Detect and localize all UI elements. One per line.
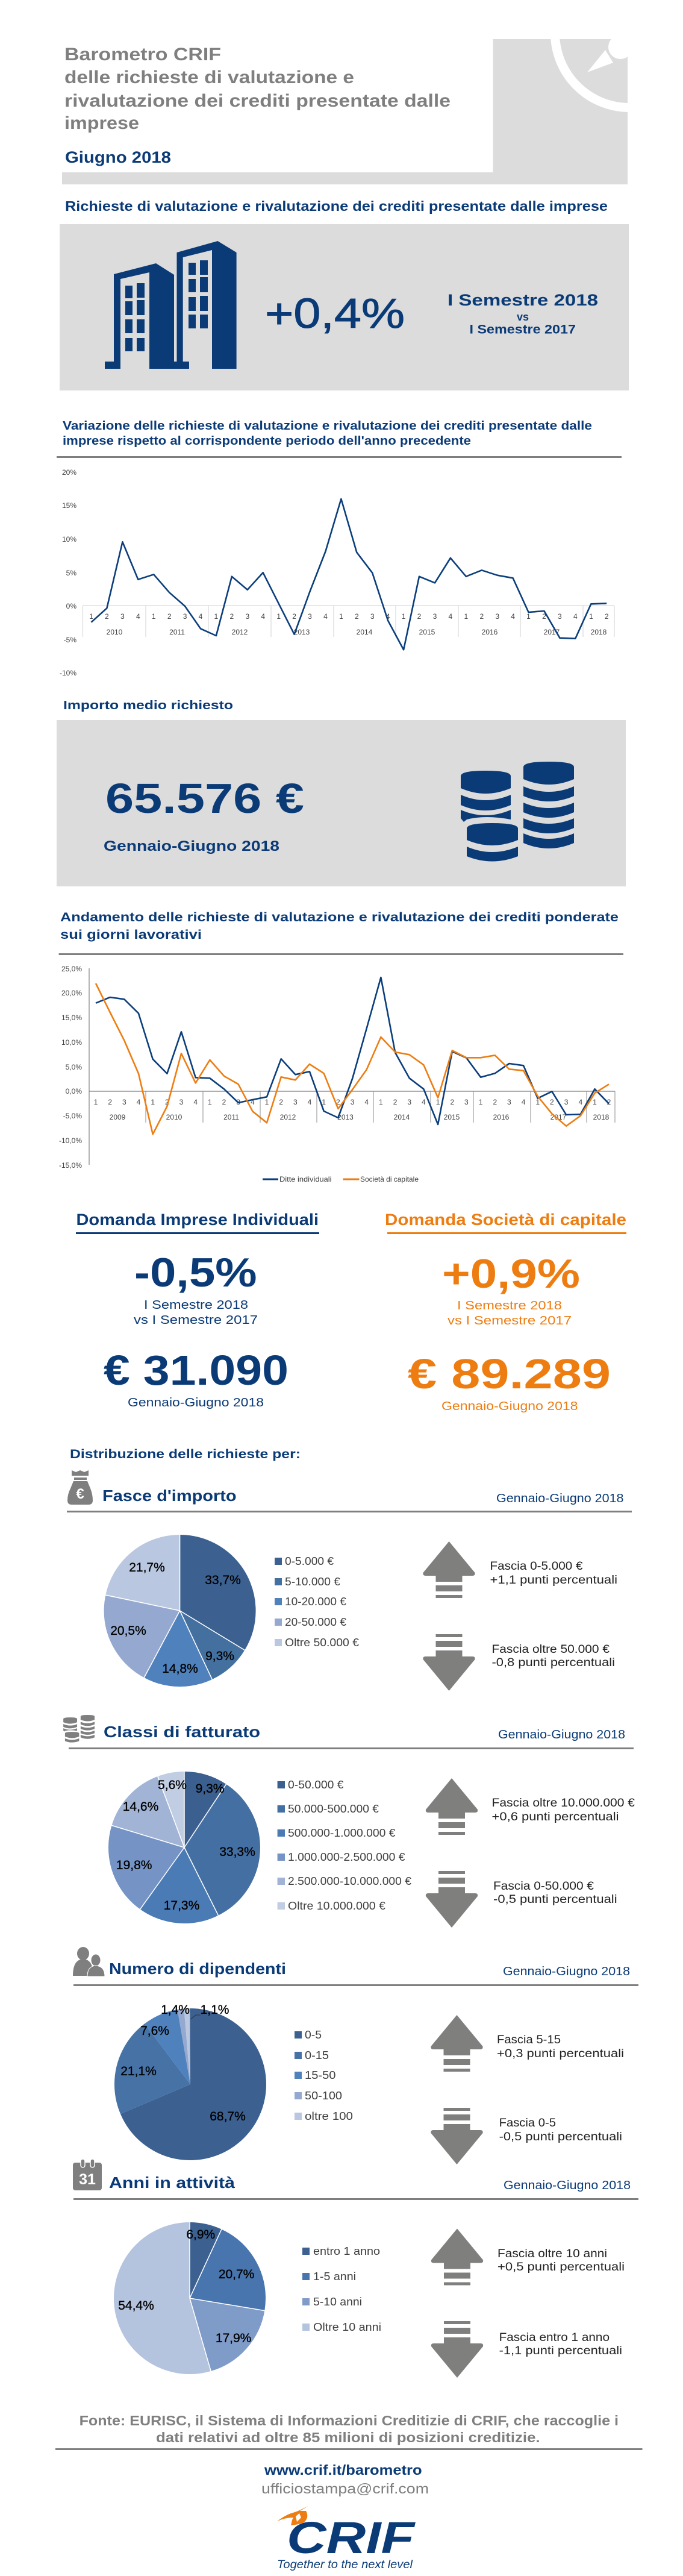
arrow down text: -0,5 punti percentuali (493, 1893, 617, 1906)
quarter labels: 4 (511, 612, 515, 621)
arrow up text (490, 1560, 617, 1587)
pie value labels: 54,4% (118, 2299, 154, 2313)
heading (60, 910, 619, 942)
year labels (107, 628, 607, 636)
pie value labels: 9,3% (196, 1782, 224, 1796)
pie value labels (116, 1778, 255, 1913)
legend: 15-50 (305, 2069, 336, 2081)
quarter labels: 4 (573, 612, 578, 621)
header white inset (62, 39, 493, 172)
year labels: 2015 (444, 1113, 460, 1121)
pie value labels: 33,7% (205, 1573, 241, 1587)
quarter labels: 1 (464, 612, 468, 621)
icon: money bag (67, 1470, 93, 1505)
y axis labels: 10,0% (61, 1038, 82, 1047)
pie value labels: 68,7% (210, 2110, 246, 2123)
section heading: Fasce d'importo (102, 1487, 237, 1505)
arrow down text: -1,1 punti percentuali (499, 2345, 622, 2357)
pie value labels (120, 2003, 246, 2123)
pie value labels: 20,7% (219, 2267, 254, 2281)
arrow down text: -0,8 punti percentuali (491, 1656, 615, 1669)
pie value labels: 21,7% (129, 1561, 165, 1575)
quarter labels: 2 (105, 612, 109, 621)
column: domanda imprese individuali (76, 1211, 319, 1409)
quarter labels: 1 (322, 1098, 326, 1106)
heading: distribuzione: Distribuzione delle richieste per: (70, 1447, 301, 1461)
quarter labels: 4 (193, 1098, 198, 1106)
arrow up text: Fascia oltre 10.000.000 € (491, 1797, 635, 1810)
quarter labels: 1 (535, 1098, 540, 1106)
year labels: 2009 (110, 1113, 126, 1121)
title (64, 45, 451, 133)
pie value labels: 21,1% (120, 2064, 157, 2078)
pie value labels (110, 1561, 241, 1676)
quarter labels: 1 (208, 1098, 212, 1106)
period: vs I Semestre 2017 (448, 1314, 572, 1327)
legend: 50.000-500.000 € (288, 1803, 379, 1815)
y axis labels: -15,0% (59, 1161, 82, 1170)
quarter labels: 2 (230, 612, 234, 621)
year labels: 2014 (357, 628, 373, 636)
panel background (60, 224, 629, 390)
y axis labels: -10% (60, 669, 76, 677)
legend (263, 1175, 419, 1183)
section heading: Numero di dipendenti (109, 1960, 286, 1978)
percentage: -0,5% (134, 1250, 257, 1296)
line series (92, 499, 607, 650)
legend: Società di capitale (360, 1175, 419, 1183)
year labels: 2013 (294, 628, 310, 636)
quarter labels: 2 (393, 1098, 398, 1106)
source note: dati relativi ad oltre 85 milioni di posizioni creditizie. (156, 2430, 540, 2445)
quarter labels: 1 (151, 1098, 155, 1106)
period: Gennaio-Giugno 2018 (498, 1728, 625, 1741)
y axis labels: 10% (62, 535, 76, 544)
period: Gennaio-Giugno 2018 (504, 2179, 631, 2192)
period comparison: I Semestre 2017 (470, 323, 576, 336)
panel: average amount (57, 720, 626, 886)
legend (295, 2029, 353, 2122)
legend: 1-5 anni (313, 2270, 356, 2283)
period comparison (448, 291, 598, 336)
quarter labels: 3 (122, 1098, 126, 1106)
arrow up (423, 1541, 475, 1598)
legend: Ditte individuali (279, 1175, 331, 1183)
icon: gauge dial (550, 39, 628, 112)
y axis labels: 25,0% (61, 965, 82, 973)
arrow up text: Fascia 0-5.000 € (490, 1560, 583, 1573)
year labels: 2011 (223, 1113, 239, 1121)
y axis labels (59, 965, 82, 1170)
section: weighted trend line chart (59, 910, 623, 1183)
arrow up text: +0,6 punti percentuali (491, 1811, 619, 1823)
panel background (57, 720, 626, 886)
y axis labels (60, 468, 76, 677)
leader line (191, 2015, 201, 2019)
icon: people (73, 1947, 105, 1976)
arrow down text (493, 1880, 617, 1906)
pie value labels: 19,8% (116, 1858, 152, 1872)
section: variation line chart (57, 419, 622, 677)
quarter labels: 4 (136, 612, 140, 621)
column heading: Domanda Società di capitale (385, 1211, 626, 1229)
arrow down text (499, 2331, 622, 2357)
quarter labels: 1 (94, 1098, 98, 1106)
quarter labels: 3 (564, 1098, 569, 1106)
legend: Oltre 50.000 € (285, 1637, 359, 1649)
section: anni in attivita (73, 2159, 638, 2378)
arrow down text: Fascia oltre 50.000 € (491, 1643, 610, 1656)
quarter labels: 3 (407, 1098, 411, 1106)
year labels: 2015 (419, 628, 435, 636)
y axis labels: 5% (66, 569, 76, 577)
arrow down text (499, 2117, 622, 2143)
quarter labels: 4 (137, 1098, 141, 1106)
legend: 0-5.000 € (285, 1555, 334, 1567)
pie chart (152, 2046, 228, 2122)
pie value labels: 9,3% (205, 1649, 234, 1663)
period (448, 1299, 572, 1327)
heading (63, 419, 592, 448)
series: societa di capitale (96, 983, 609, 1134)
y axis labels: 0,0% (66, 1087, 82, 1095)
quarter labels: 2 (336, 1098, 340, 1106)
quarter labels: 3 (183, 612, 187, 621)
logo swoosh (277, 2506, 308, 2525)
arrow up text: Fascia oltre 10 anni (497, 2248, 607, 2260)
quarter labels: 2 (165, 1098, 169, 1106)
legend: 0-50.000 € (288, 1779, 343, 1791)
column heading: Domanda Imprese Individuali (76, 1211, 319, 1229)
amount period: Gennaio-Giugno 2018 (128, 1396, 264, 1409)
quarter labels: 2 (605, 612, 609, 621)
section: numero di dipendenti (73, 1947, 638, 2164)
section: classi di fatturato (63, 1715, 635, 1928)
period: I Semestre 2018 (144, 1299, 248, 1312)
year labels: 2011 (169, 628, 185, 636)
period: vs I Semestre 2017 (134, 1314, 258, 1327)
year labels: 2016 (493, 1113, 510, 1121)
quarter labels: 4 (251, 1098, 255, 1106)
quarter labels: 1 (214, 612, 219, 621)
legend: 1.000.000-2.500.000 € (288, 1851, 405, 1863)
legend (275, 1555, 359, 1649)
quarter labels: 2 (417, 612, 422, 621)
value: 65.576 € (105, 775, 304, 822)
y axis labels: 20,0% (61, 989, 82, 997)
quarter labels: 1 (479, 1098, 483, 1106)
heading: imprese rispetto al corrispondente periodo dell'anno precedente (63, 434, 471, 448)
heading: richieste: Richieste di valutazione e rivalutazione dei crediti presentate dalle imprese (65, 198, 608, 214)
heading: importo medio: Importo medio richiesto (63, 699, 233, 712)
y axis labels: 15,0% (61, 1014, 82, 1022)
pie chart (111, 1772, 226, 1916)
title: delle richieste di valutazione e (64, 67, 354, 87)
arrow down (431, 2108, 483, 2164)
quarter labels: 4 (578, 1098, 582, 1106)
heading: Variazione delle richieste di valutazione e rivalutazione dei crediti presentate dalle (63, 419, 592, 433)
quarter labels: 2 (607, 1098, 611, 1106)
arrow down text (491, 1643, 615, 1669)
legend: Oltre 10.000.000 € (288, 1900, 385, 1912)
quarter labels: 3 (464, 1098, 469, 1106)
pie value labels: 14,6% (123, 1800, 158, 1814)
legend: 10-20.000 € (285, 1596, 346, 1608)
quarter labels: 1 (276, 612, 281, 621)
pie value labels: 33,3% (219, 1845, 255, 1859)
pie value labels: 17,9% (216, 2331, 251, 2345)
quarter labels: 4 (522, 1098, 526, 1106)
period: I Semestre 2018 (457, 1299, 562, 1312)
year labels: 2012 (280, 1113, 296, 1121)
quarter labels: 2 (167, 612, 172, 621)
icon: calendar: 31 (79, 2171, 96, 2188)
quarter labels: 4 (261, 612, 265, 621)
year labels: 2018 (593, 1113, 610, 1121)
period comparison: vs (517, 311, 529, 323)
quarter labels: 1 (265, 1098, 269, 1106)
quarter labels: 3 (245, 612, 249, 621)
y axis labels: 5,0% (66, 1063, 82, 1071)
logo word: CRIF (287, 2513, 416, 2563)
legend (278, 1779, 411, 1912)
pie value labels: 6,9% (186, 2228, 215, 2242)
legend (302, 2245, 381, 2333)
logo tagline: Together to the next level (277, 2559, 413, 2571)
percentage: +0,9% (442, 1251, 580, 1297)
year labels: 2010 (166, 1113, 182, 1121)
heading: sui giorni lavorativi (60, 928, 202, 942)
panel: variation kpi (60, 224, 629, 390)
year labels: 2013 (337, 1113, 354, 1121)
arrow up text: Fascia 5-15 (497, 2034, 561, 2046)
quarter labels: 3 (370, 612, 375, 621)
icon: calendar (73, 2159, 102, 2190)
quarter labels: 2 (292, 612, 296, 621)
section heading: Classi di fatturato (104, 1723, 260, 1741)
arrow down text: Fascia 0-50.000 € (493, 1880, 594, 1893)
quarter labels: 3 (558, 612, 562, 621)
amount: € 31.090 (104, 1347, 288, 1394)
legend: 5-10 anni (313, 2296, 362, 2308)
arrow up (426, 1778, 478, 1835)
logo: CRIF (277, 2506, 416, 2571)
quarter labels: 3 (236, 1098, 240, 1106)
quarter labels: 3 (179, 1098, 184, 1106)
quarter labels: 4 (449, 612, 453, 621)
value: +0,4% (265, 290, 405, 337)
quarter labels: 2 (355, 612, 359, 621)
year labels: 2012 (232, 628, 248, 636)
pie value labels: 7,6% (140, 2024, 169, 2038)
source note (80, 2413, 619, 2445)
quarter labels: 1 (379, 1098, 383, 1106)
title: Barometro CRIF (64, 45, 221, 64)
quarter labels: 2 (542, 612, 546, 621)
header panel (62, 39, 628, 184)
year labels (110, 1113, 610, 1121)
quarter labels: 3 (293, 1098, 298, 1106)
quarter labels: 4 (323, 612, 328, 621)
year labels: 2017 (550, 1113, 567, 1121)
icon: money bag: € (76, 1486, 84, 1502)
arrow up (431, 2228, 483, 2285)
quarter labels: 2 (493, 1098, 497, 1106)
legend: 0-15 (305, 2049, 329, 2061)
arrow up text: +0,5 punti percentuali (497, 2261, 625, 2274)
arrow down (431, 2321, 483, 2378)
period comparison: I Semestre 2018 (448, 291, 598, 309)
arrow down text: Fascia 0-5 (499, 2117, 556, 2129)
arrow down (423, 1634, 475, 1691)
quarter labels: 3 (433, 612, 437, 621)
quarter labels: 2 (479, 612, 484, 621)
section heading: Anni in attività (109, 2173, 235, 2192)
arrow up text (497, 2248, 625, 2274)
legend: 0-5 (305, 2029, 322, 2041)
pie chart (152, 2222, 264, 2371)
quarter labels: 4 (199, 612, 203, 621)
quarter labels: 4 (364, 1098, 369, 1106)
pie value labels: 14,8% (162, 1662, 198, 1676)
year labels: 2018 (591, 628, 607, 636)
quarter labels: 1 (593, 1098, 597, 1106)
pie value labels: 1,1% (201, 2003, 229, 2017)
year labels: 2014 (394, 1113, 410, 1121)
quarter labels: 3 (351, 1098, 355, 1106)
arrow down text: -0,5 punti percentuali (499, 2131, 622, 2143)
quarter labels: 3 (495, 612, 499, 621)
amount period: Gennaio-Giugno 2018 (441, 1400, 578, 1413)
quarter labels: 1 (436, 1098, 440, 1106)
heading: Andamento delle richieste di valutazione e rivalutazione dei crediti ponderate (60, 910, 619, 924)
legend: 20-50.000 € (285, 1616, 346, 1628)
legend: 2.500.000-10.000.000 € (288, 1875, 411, 1887)
quarter labels: 2 (108, 1098, 112, 1106)
quarter labels: 3 (507, 1098, 511, 1106)
period: Gennaio-Giugno 2018 (496, 1492, 624, 1505)
source note: Fonte: EURISC, il Sistema di Informazioni Creditizie di CRIF, che raccoglie i (80, 2413, 619, 2428)
quarter labels: 1 (339, 612, 343, 621)
series: ditte individuali (96, 977, 609, 1124)
period: Gennaio-Giugno 2018 (104, 838, 279, 854)
arrow up (431, 2015, 483, 2072)
year labels: 2010 (107, 628, 123, 636)
quarter labels: 1 (89, 612, 93, 621)
date heading: Giugno 2018 (65, 148, 171, 166)
website link: www.crif.it/barometro (264, 2462, 422, 2478)
legend: Oltre 10 anni (313, 2321, 381, 2333)
legend: entro 1 anno (313, 2245, 380, 2257)
period (134, 1299, 258, 1327)
quarter labels: 1 (589, 612, 593, 621)
quarter labels: 2 (222, 1098, 226, 1106)
legend: oltre 100 (305, 2110, 353, 2122)
arrow down text: Fascia entro 1 anno (499, 2331, 610, 2344)
quarter labels: 1 (152, 612, 156, 621)
y axis labels: -5,0% (63, 1112, 82, 1120)
y axis labels: 0% (66, 602, 76, 610)
quarter labels (89, 612, 609, 621)
arrow up text (491, 1797, 635, 1823)
quarter labels (94, 1098, 611, 1106)
quarter labels: 3 (308, 612, 312, 621)
pie value labels: 5,6% (158, 1778, 187, 1792)
header grey frame (62, 39, 628, 184)
quarter labels: 4 (386, 612, 390, 621)
icon: coins (63, 1715, 95, 1743)
y axis labels: -10,0% (59, 1136, 82, 1145)
section: fasce d'importo (67, 1470, 632, 1691)
arrow up text (497, 2034, 624, 2060)
quarter labels: 1 (526, 612, 531, 621)
quarter labels: 2 (279, 1098, 283, 1106)
quarter labels: 3 (120, 612, 125, 621)
pie value labels: 17,3% (164, 1899, 199, 1913)
title: imprese (64, 113, 139, 133)
legend: 50-100 (305, 2090, 342, 2102)
pie value labels (118, 2228, 254, 2345)
arrow up text: +1,1 punti percentuali (490, 1574, 617, 1587)
title: rivalutazione dei crediti presentate dalle (64, 91, 451, 111)
quarter labels: 2 (450, 1098, 454, 1106)
year labels: 2017 (544, 628, 560, 636)
arrow down (426, 1871, 478, 1928)
pie chart (105, 1535, 245, 1679)
y axis labels: 15% (62, 501, 76, 510)
icon: buildings (105, 241, 237, 369)
legend: 5-10.000 € (285, 1576, 340, 1588)
pie value labels: 20,5% (110, 1624, 146, 1638)
y axis labels: -5% (64, 636, 76, 644)
quarter labels: 4 (422, 1098, 426, 1106)
quarter labels: 2 (550, 1098, 554, 1106)
quarter labels: 1 (402, 612, 406, 621)
press email: ufficiostampa@crif.com (261, 2481, 429, 2496)
amount: € 89.289 (408, 1350, 611, 1397)
year labels: 2016 (482, 628, 498, 636)
icon: coin stacks (461, 762, 574, 862)
pie value labels: 1,4% (161, 2003, 190, 2017)
period: Gennaio-Giugno 2018 (503, 1965, 630, 1978)
y axis labels: 20% (62, 468, 76, 477)
quarter labels: 4 (308, 1098, 312, 1106)
column: domanda societa di capitale (385, 1211, 626, 1413)
legend: 500.000-1.000.000 € (288, 1827, 395, 1839)
arrow up text: +0,3 punti percentuali (497, 2048, 624, 2060)
